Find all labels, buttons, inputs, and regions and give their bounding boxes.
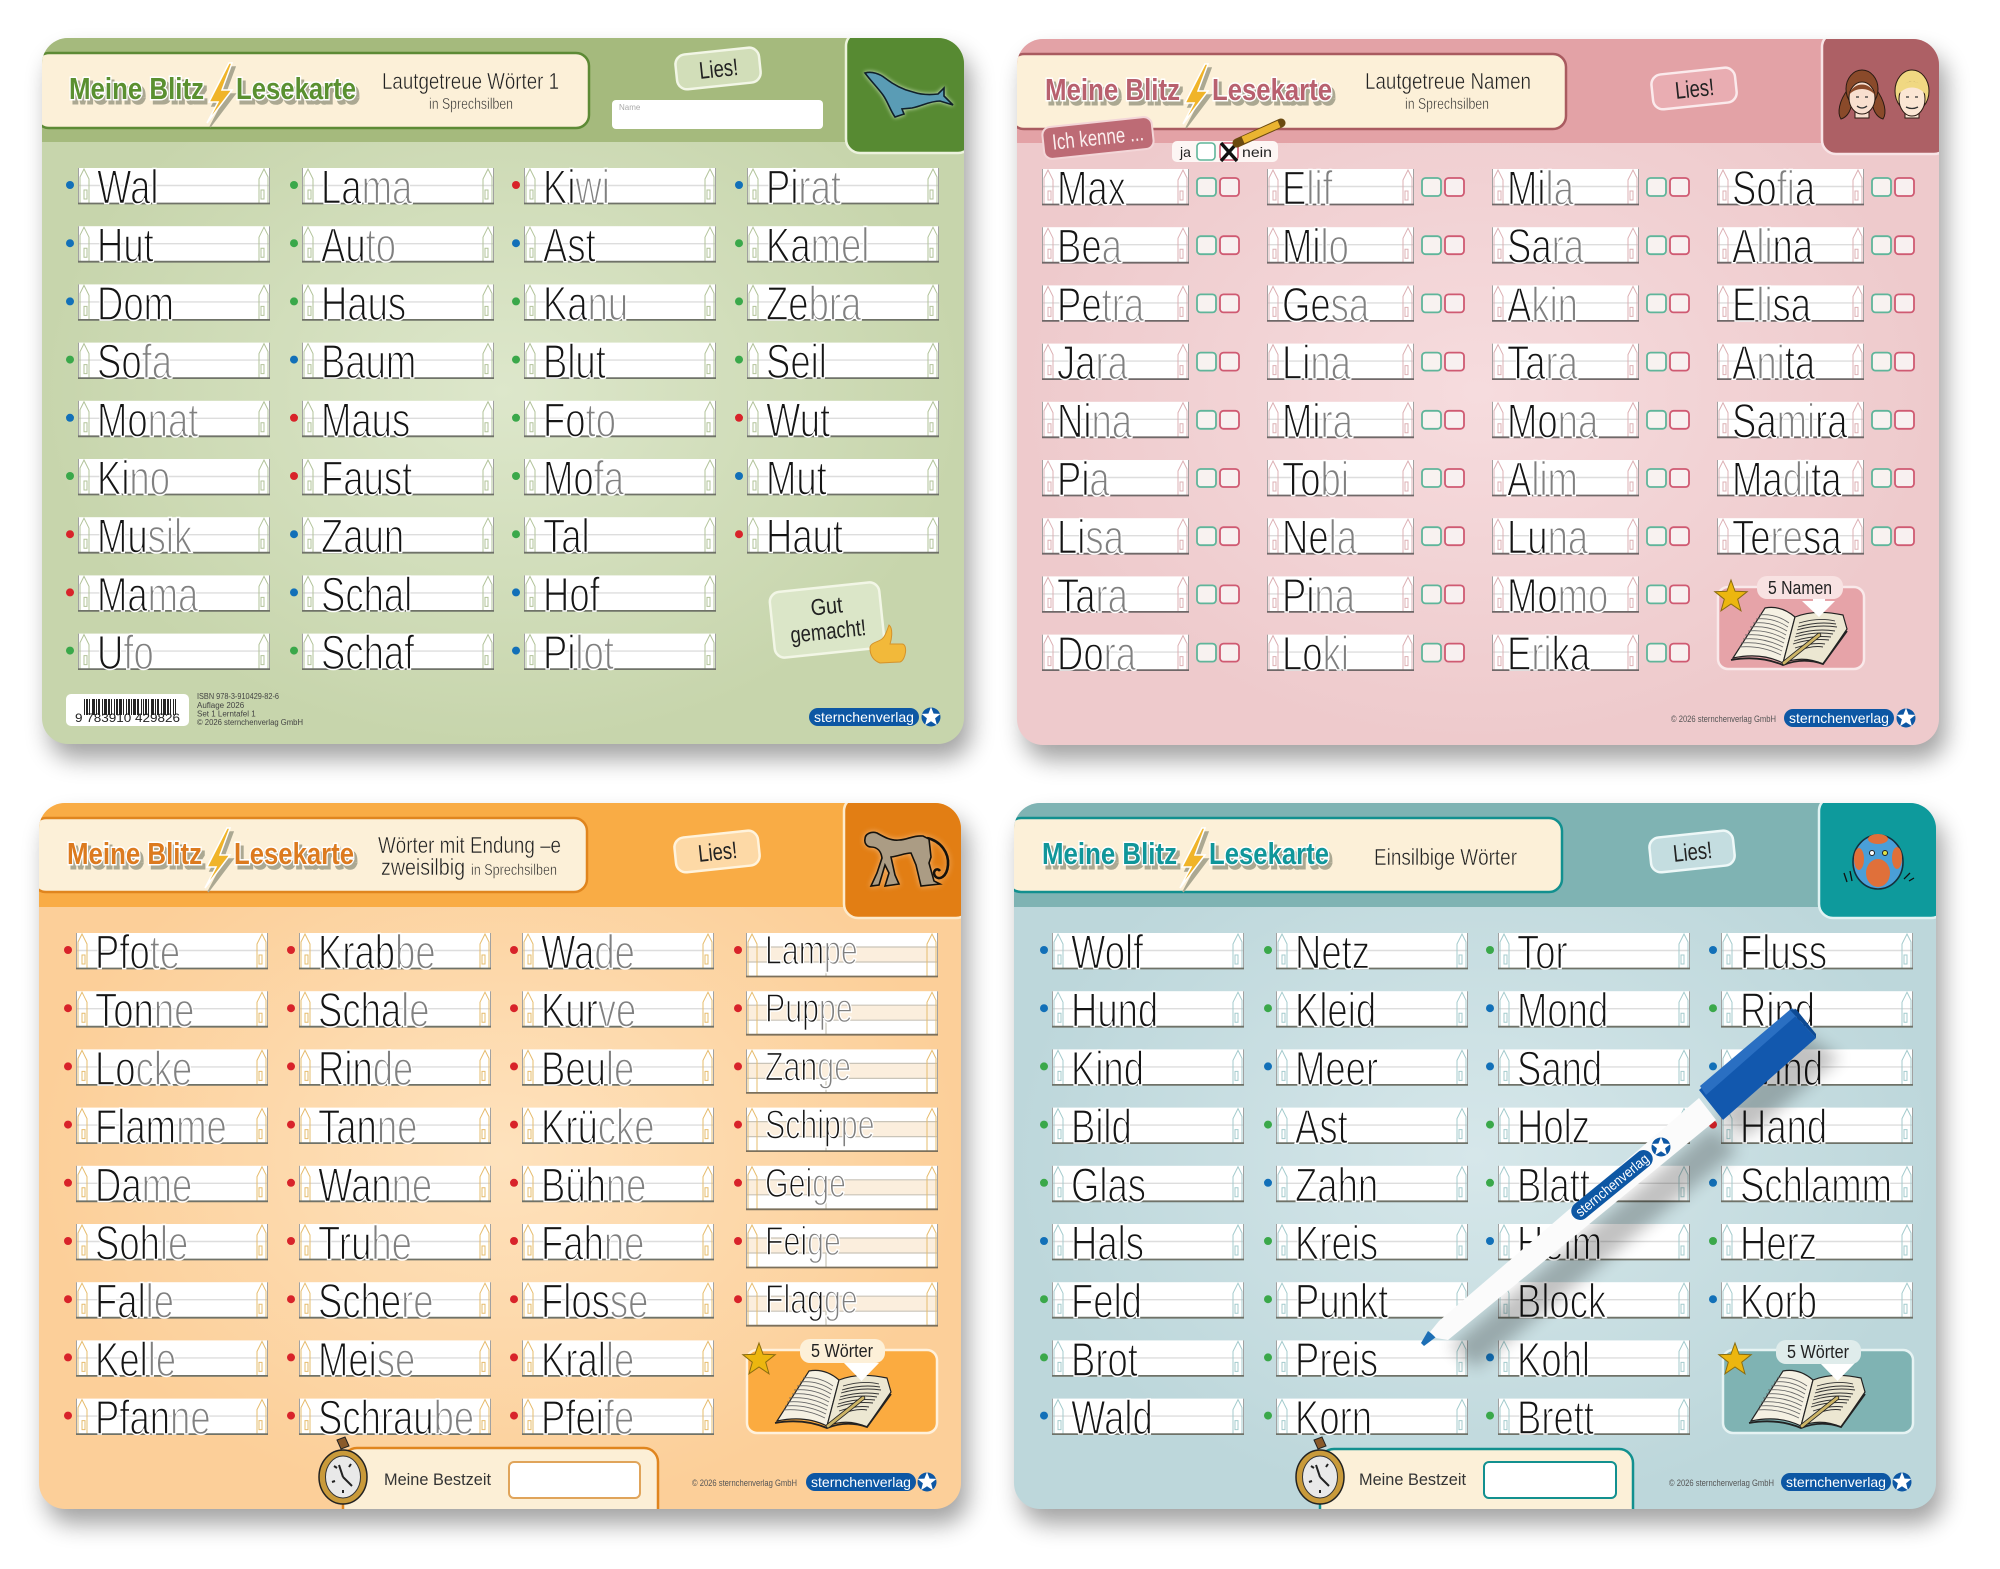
word column 3: Fahne: [541, 1217, 644, 1271]
word column 1: Falle: [95, 1275, 174, 1329]
word column 3: Kralle: [541, 1333, 634, 1387]
word column 2: Korn: [1295, 1391, 1372, 1445]
marker pen: [1421, 1008, 1840, 1368]
copyright: © 2026 sternchenverlag GmbH: [692, 1478, 797, 1488]
publisher logo: sternchenverlag: [811, 1474, 911, 1490]
word column 1: Pfote: [95, 926, 180, 980]
callout: 5 Wörter book: [743, 1339, 937, 1433]
word column 1: Kind: [1071, 1042, 1144, 1096]
word column 4: Zebra: [766, 277, 862, 331]
sticker: Gut gemacht: [769, 581, 885, 659]
imprint text: [197, 692, 303, 727]
word column 4: Flagge: [765, 1276, 858, 1322]
icon: stopwatch: [1296, 1437, 1344, 1504]
title logo: Meine Blitz Lesekarte: [67, 828, 354, 888]
word column 2: [290, 161, 494, 680]
name column 2: Loki: [1282, 627, 1349, 681]
title logo: Meine Blitz Lesekarte: Meine Blitz: [1045, 72, 1180, 107]
imprint text: Auflage 2026: [197, 701, 245, 710]
word column 1: Dom: [97, 277, 174, 331]
word column 4: Kamel: [766, 219, 869, 273]
name column 1: Petra: [1057, 278, 1144, 332]
word column 3: Tal: [543, 510, 590, 564]
word column 1: Mama: [97, 568, 199, 622]
name column 1: [1042, 162, 1239, 681]
word column 4: Puppe: [765, 985, 853, 1031]
sticker: Lies!: Lies!: [698, 54, 739, 85]
title logo: Meine Blitz Lesekarte: [1045, 64, 1332, 124]
word column 2: Meer: [1295, 1042, 1378, 1096]
word column 2: Punkt: [1295, 1275, 1388, 1329]
word column 3: Block: [1517, 1275, 1607, 1329]
subtitle: [378, 832, 561, 880]
title logo: Meine Blitz Lesekarte: [1042, 828, 1329, 888]
name column 4: Anita: [1732, 336, 1815, 390]
name column 1: Bea: [1057, 220, 1122, 274]
word column 1: Tonne: [95, 984, 194, 1038]
name field: [612, 100, 823, 129]
title logo: Meine Blitz Lesekarte: Meine Blitz: [69, 71, 204, 106]
word column 4: Herz: [1740, 1217, 1817, 1271]
word column 1: Feld: [1071, 1275, 1142, 1329]
word column 3: Foto: [543, 394, 616, 448]
word column 4: [734, 926, 938, 1326]
word column 1: Ufo: [97, 626, 154, 680]
panel: teal card Einsilbige Wörter: [1008, 797, 1945, 1529]
word column 4: Schlamm: [1740, 1159, 1892, 1213]
word column 2: Zaun: [321, 510, 404, 564]
name column 3: Akin: [1507, 278, 1578, 332]
publisher logo: [809, 707, 940, 726]
name column 2: Tobi: [1282, 453, 1349, 507]
subtitle: Lautgetreue Wörter 1: [382, 68, 559, 94]
word column 1: Glas: [1071, 1159, 1146, 1213]
name column 3: Momo: [1507, 569, 1608, 623]
word column 3: Mofa: [543, 452, 624, 506]
name column 3: Mila: [1507, 162, 1574, 216]
sticker: Lies!: Lies!: [1672, 837, 1713, 868]
word column 2: Krabbe: [318, 926, 436, 980]
word column 2: Schal: [321, 568, 412, 622]
word column 1: Locke: [95, 1042, 192, 1096]
best-time tab: Meine Bestzeit: [1359, 1470, 1466, 1489]
legend: ja / nein: ja: [1179, 144, 1191, 160]
word column 3: Krücke: [541, 1100, 655, 1154]
imprint text: © 2026 sternchenverlag GmbH: [197, 718, 303, 727]
sticker: Gut gemacht: gemacht!: [789, 614, 867, 648]
word column 3: Brett: [1517, 1391, 1594, 1445]
subtitle: in Sprechsilben: [1405, 96, 1489, 113]
word column 4: [1709, 926, 1913, 1329]
subtitle: zweisilbig: [381, 854, 465, 880]
name field: Name: [619, 103, 641, 112]
word column 3: Sand: [1517, 1042, 1602, 1096]
word column 1: Sofa: [97, 335, 172, 389]
publisher logo: [1781, 1472, 1912, 1492]
callout: 5 Wörter book: [1719, 1340, 1913, 1433]
word column 3: Kiwi: [543, 161, 610, 215]
word column 2: Maus: [321, 394, 410, 448]
word column 1: Hund: [1071, 984, 1158, 1038]
publisher logo: sternchenverlag: [814, 709, 914, 725]
subtitle: [1365, 68, 1531, 113]
word column 3: Blut: [543, 335, 606, 389]
publisher logo: [806, 1472, 936, 1492]
word column 2: Faust: [321, 452, 412, 506]
word column 3: Kanu: [543, 277, 628, 331]
word column 4: Korb: [1740, 1275, 1817, 1329]
name column 1: Jara: [1057, 336, 1128, 390]
word column 1: Brot: [1071, 1333, 1138, 1387]
word column 3: Bühne: [541, 1159, 646, 1213]
word column 2: Haus: [321, 277, 406, 331]
word column 2: [1264, 926, 1468, 1445]
name column 2: [1267, 162, 1464, 681]
callout: 5 Namen book: [1715, 576, 1864, 669]
panel: pink card Lautgetreue Namen: [1011, 33, 1948, 760]
imprint text: ISBN 978-3-910429-82-6: [197, 692, 280, 701]
word column 1: Wal: [97, 161, 158, 215]
sticker: Lies!: [1650, 67, 1738, 110]
word column 4: Schippe: [765, 1101, 875, 1148]
word column 3: Kurve: [541, 984, 636, 1038]
word column 1: Kelle: [95, 1333, 176, 1387]
title logo: Meine Blitz Lesekarte: Lesekarte: [236, 71, 356, 106]
word column 3: Kohl: [1517, 1333, 1590, 1387]
name column 3: Tara: [1507, 336, 1578, 390]
word column 3: Tor: [1517, 926, 1568, 980]
name column 1: Tara: [1057, 569, 1128, 623]
name column 2: Nela: [1282, 511, 1357, 565]
word column 2: Kreis: [1295, 1217, 1378, 1271]
subtitle: [382, 68, 559, 113]
title logo: Meine Blitz Lesekarte: Lesekarte: [1209, 836, 1329, 871]
subtitle: Wörter mit Endung –e: [378, 832, 561, 858]
subtitle: Lautgetreue Namen: [1365, 68, 1531, 94]
title logo: Meine Blitz Lesekarte: Lesekarte: [1212, 72, 1332, 107]
subtitle: Einsilbige Wörter: [1374, 844, 1517, 870]
name column 4: Samira: [1732, 395, 1848, 449]
word column 2: Tanne: [318, 1100, 417, 1154]
word column 2: Preis: [1295, 1333, 1378, 1387]
word column 2: Wanne: [318, 1159, 432, 1213]
word column 4: Zange: [765, 1043, 851, 1089]
sticker: Ich kenne: Ich kenne ...: [1051, 120, 1145, 155]
word column 2: Auto: [321, 219, 396, 273]
subtitle: in Sprechsilben: [471, 862, 557, 879]
word column 1: [66, 161, 270, 680]
best-time tab: Meine Bestzeit: [384, 1470, 491, 1489]
title logo: Meine Blitz Lesekarte: Meine Blitz: [67, 836, 202, 871]
name column 3: Mona: [1507, 395, 1598, 449]
name column 1: Max: [1057, 162, 1126, 216]
word column 3: Mond: [1517, 984, 1608, 1038]
barcode: 9 783910 429826: [75, 711, 180, 725]
sticker: Lies!: Lies!: [1674, 74, 1715, 105]
word column 4: Feige: [765, 1217, 841, 1264]
word column 2: Lama: [321, 161, 413, 215]
name column 2: Elif: [1282, 162, 1333, 216]
pen label: sternchenverlag: [1572, 1150, 1652, 1220]
word column 2: Truhe: [318, 1217, 412, 1271]
word column 1: Hals: [1071, 1217, 1144, 1271]
word column 4: Mut: [766, 452, 827, 506]
word column 4: Lampe: [765, 926, 858, 973]
sticker: Lies!: [674, 47, 762, 90]
name column 3: Sara: [1507, 220, 1584, 274]
name column 2: Gesa: [1282, 278, 1369, 332]
word column 2: Meise: [318, 1333, 415, 1387]
word column 1: Sohle: [95, 1217, 188, 1271]
name column 4: Elisa: [1732, 278, 1811, 332]
word column 1: Hut: [97, 219, 154, 273]
legend: ja / nein: nein: [1242, 144, 1272, 160]
word column 2: Schraube: [318, 1391, 474, 1445]
copyright: © 2026 sternchenverlag GmbH: [1671, 714, 1776, 724]
name column 3: [1492, 162, 1689, 681]
name column 3: Alim: [1507, 453, 1578, 507]
word column 2: Schale: [318, 984, 430, 1038]
word column 4: Seil: [766, 335, 827, 389]
callout: 5 Namen book: 5 Namen: [1768, 578, 1832, 598]
word column 4: Haut: [766, 510, 843, 564]
icon: two children: [1839, 70, 1929, 119]
word column 2: Netz: [1295, 926, 1370, 980]
panel: green card Lautgetreue Wörter 1: [36, 32, 972, 759]
word column 1: [1040, 926, 1244, 1445]
icon: ball: [1844, 834, 1914, 889]
sticker: Gut gemacht: Gut: [809, 591, 844, 621]
word column 3: Flosse: [541, 1275, 648, 1329]
word column 4: Wut: [766, 394, 830, 448]
name column 4: Alina: [1732, 220, 1813, 274]
word column 3: [510, 926, 714, 1445]
callout: 5 Wörter book: 5 Wörter: [811, 1341, 873, 1361]
word column 2: Rinde: [318, 1042, 413, 1096]
sticker: Lies!: [1648, 830, 1736, 873]
word column 1: Monat: [97, 394, 199, 448]
word column 4: Hand: [1740, 1100, 1827, 1154]
name column 2: Milo: [1282, 220, 1349, 274]
copyright: © 2026 sternchenverlag GmbH: [1669, 1478, 1774, 1488]
name column 3: Erika: [1507, 627, 1590, 681]
word column 1: Pfanne: [95, 1391, 211, 1445]
word column 2: Kleid: [1295, 984, 1376, 1038]
word column 2: Zahn: [1295, 1159, 1378, 1213]
publisher logo: sternchenverlag: [1789, 710, 1889, 726]
word column 1: Musik: [97, 510, 193, 564]
word column 2: Schere: [318, 1275, 434, 1329]
legend: ja / nein: [1172, 141, 1278, 162]
title logo: Meine Blitz Lesekarte: Lesekarte: [234, 836, 354, 871]
sticker: Lies!: Lies!: [697, 837, 738, 868]
word column 2: Schaf: [321, 626, 414, 680]
word column 4: Pirat: [766, 161, 841, 215]
subtitle: in Sprechsilben: [429, 96, 513, 113]
name column 3: Luna: [1507, 511, 1588, 565]
word column 1: Dame: [95, 1159, 192, 1213]
name column 1: Nina: [1057, 395, 1132, 449]
word column 4: Geige: [765, 1159, 846, 1206]
word column 3: Wade: [541, 926, 635, 980]
sticker: Ich kenne: [1042, 116, 1154, 160]
word column 2: Ast: [1295, 1100, 1348, 1154]
sticker: Lies!: [673, 830, 761, 873]
icon: whale: [865, 72, 953, 117]
imprint text: Set 1 Lerntafel 1: [197, 710, 256, 718]
word column 3: [512, 161, 716, 680]
word column 3: Hof: [543, 568, 600, 622]
best-time tab: [1318, 1448, 1634, 1509]
icon: stopwatch: [319, 1437, 367, 1504]
word column 4: Rind: [1740, 984, 1815, 1038]
name column 4: Teresa: [1732, 511, 1842, 565]
title logo: Meine Blitz Lesekarte: Meine Blitz: [1042, 836, 1177, 871]
icon: pencil: [1237, 123, 1281, 143]
name column 1: Dora: [1057, 627, 1136, 681]
word column 3: [1486, 926, 1690, 1445]
publisher logo: sternchenverlag: [1786, 1474, 1886, 1490]
word column 1: Flamme: [95, 1100, 227, 1154]
word column 1: [64, 926, 268, 1445]
word column 4: [735, 161, 939, 564]
publisher logo: [1784, 708, 1916, 728]
name column 2: Pina: [1282, 569, 1355, 623]
word column 3: Pilot: [543, 626, 614, 680]
word column 1: Wald: [1071, 1391, 1153, 1445]
name column 1: Lisa: [1057, 511, 1124, 565]
word column 3: Helm: [1517, 1217, 1602, 1271]
word column 4: Fluss: [1740, 926, 1827, 980]
title logo: Meine Blitz Lesekarte: [69, 63, 356, 123]
name column 1: Pia: [1057, 453, 1110, 507]
name column 4: [1717, 162, 1914, 565]
word column 2: [287, 926, 491, 1445]
word column 1: Bild: [1071, 1100, 1132, 1154]
best-time tab: [342, 1446, 660, 1509]
word column 3: Holz: [1517, 1100, 1590, 1154]
icon: monkey: [865, 832, 948, 886]
barcode: [66, 694, 189, 726]
name column 2: Mira: [1282, 395, 1353, 449]
word column 3: Pfeife: [541, 1391, 634, 1445]
name column 4: Sofia: [1732, 162, 1815, 216]
word column 4: Wind: [1740, 1042, 1823, 1096]
name column 4: Madita: [1732, 453, 1842, 507]
word column 1: Kino: [97, 452, 170, 506]
word column 2: Baum: [321, 335, 416, 389]
word column 1: Wolf: [1071, 926, 1143, 980]
word column 3: Blatt: [1517, 1159, 1590, 1213]
callout: 5 Wörter book: 5 Wörter: [1787, 1342, 1849, 1362]
name column 2: Lina: [1282, 336, 1351, 390]
word column 3: Beule: [541, 1042, 634, 1096]
word column 3: Ast: [543, 219, 596, 273]
panel: orange card Wörter mit Endung -e: [33, 797, 970, 1528]
icon: thumbs up: [870, 625, 906, 663]
